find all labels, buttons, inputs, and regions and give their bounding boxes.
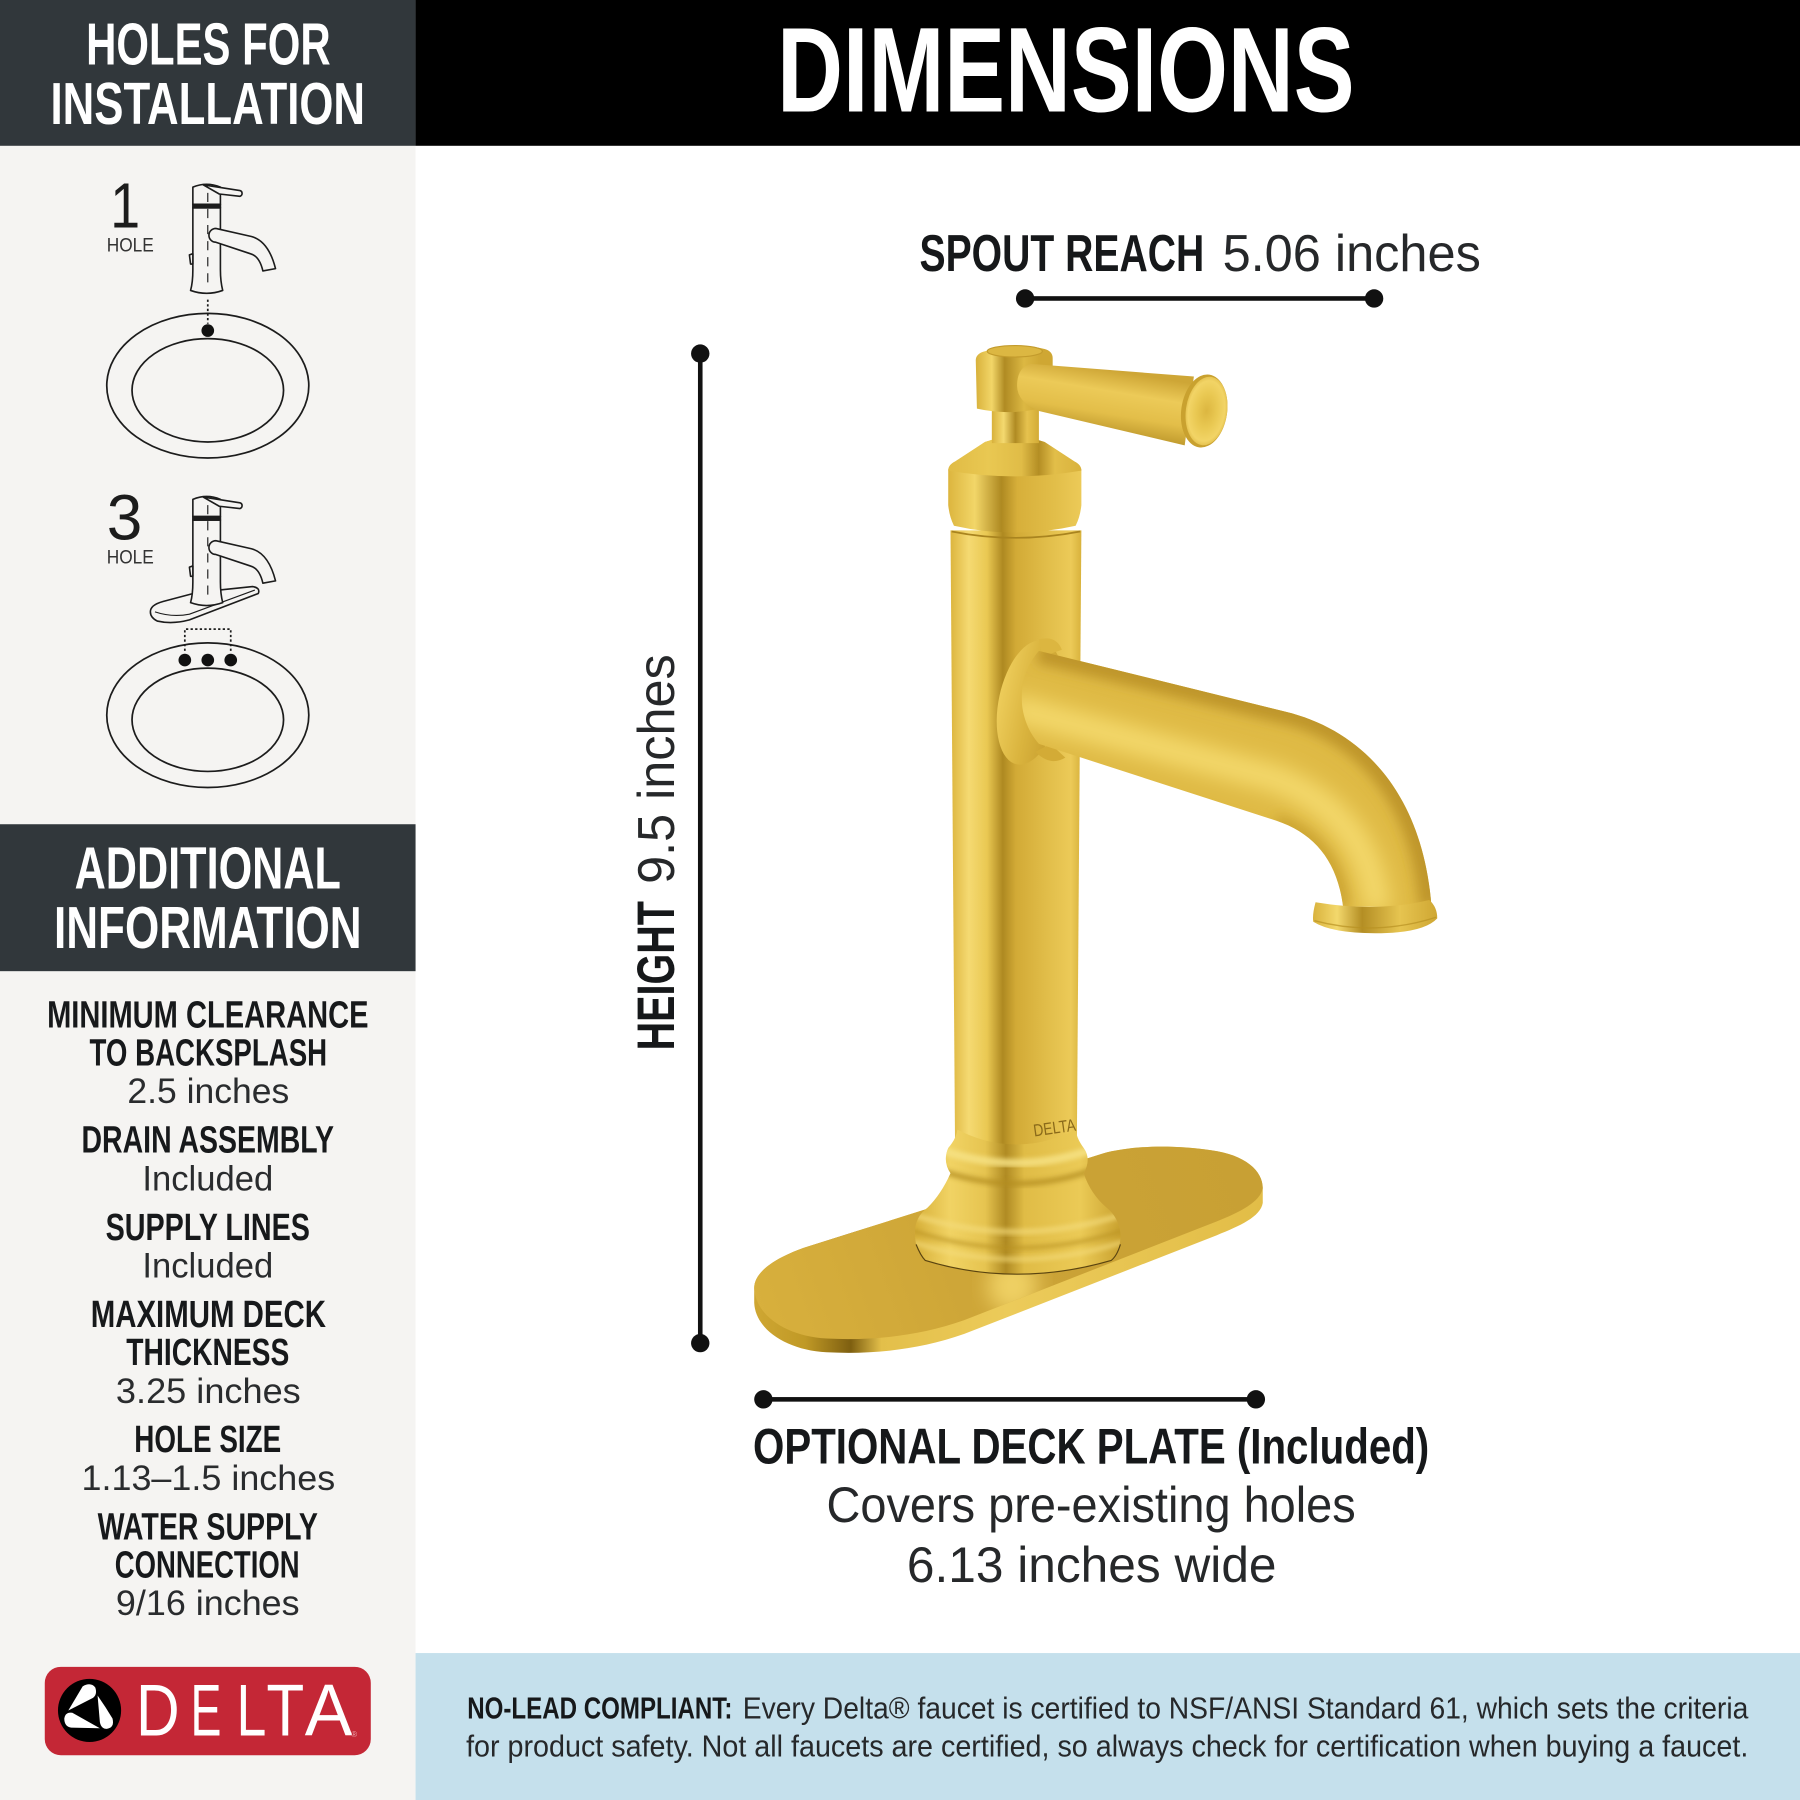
deck plate (754, 1147, 1263, 1353)
text block: optional deck plate: 6.13 inches wide (907, 1536, 1277, 1593)
icon: faucet (189, 184, 276, 293)
label: 1 hole: 1 (110, 169, 140, 241)
head collar (948, 437, 1081, 538)
spec: water supply connection: CONNECTION (115, 1544, 300, 1586)
spec: hole size: 1.13–1.5 inches (82, 1458, 335, 1498)
label: 1 hole: HOLE (107, 235, 154, 256)
delta mark on column: DELTA (1032, 1115, 1077, 1140)
spec: supply lines: Included (142, 1246, 273, 1286)
title: dimensions: DIMENSIONS (777, 2, 1355, 137)
spec: maximum deck thickness (91, 1294, 326, 1411)
panel: no-lead compliant note (416, 1653, 1800, 1800)
logo wordmark: D (136, 1669, 180, 1752)
stem (992, 409, 1039, 443)
text block: additional information list (47, 994, 368, 1623)
spec: supply lines: SUPPLY LINES (106, 1207, 310, 1249)
spec: drain assembly: DRAIN ASSEMBLY (82, 1120, 334, 1162)
spec: minimum clearance: MINIMUM CLEARANCE (47, 994, 368, 1036)
panel: no-lead compliant note: Every Delta® faucet is certified to NSF/ANSI Standard 61, which sets the criteria (743, 1691, 1748, 1725)
icon group: 3 hole installation (107, 482, 309, 788)
logo wordmark: L (236, 1669, 266, 1752)
heading: holes for installation (0, 0, 416, 146)
spout tube (1022, 651, 1432, 907)
logo wordmark (136, 1669, 352, 1752)
logo wordmark: T (266, 1669, 304, 1752)
panel: no-lead compliant note: NO-LEAD COMPLIANT: (467, 1691, 732, 1725)
spec: water supply connection (98, 1506, 318, 1623)
spout outlet (1313, 900, 1437, 933)
text block: optional deck plate: OPTIONAL DECK PLATE (Included) (753, 1418, 1429, 1475)
text block: optional deck plate (753, 1418, 1429, 1593)
spec: hole size (82, 1419, 335, 1498)
arrow: deck plate dimension line (754, 1390, 1265, 1409)
panel: left sidebar (0, 0, 416, 1800)
heading: holes for installation: INSTALLATION (51, 70, 365, 137)
handle hub (976, 346, 1053, 412)
label: 3 hole (107, 482, 154, 569)
spec: drain assembly: Included (142, 1158, 273, 1198)
spec: minimum clearance (47, 994, 368, 1111)
label: height: 9.5 inches (627, 654, 685, 884)
label: spout reach (920, 224, 1481, 282)
logo wordmark: A (305, 1669, 352, 1752)
arrow: height dimension line (691, 344, 709, 1352)
label: height: HEIGHT (627, 901, 686, 1050)
label: spout reach: 5.06 inches (1223, 224, 1481, 282)
heading: additional information (0, 824, 416, 971)
logo: delta: ® (351, 1730, 357, 1739)
heading: holes for installation: HOLES FOR (86, 10, 331, 77)
icon: sink with three holes (107, 629, 309, 788)
spec: supply lines (106, 1207, 310, 1286)
logo: delta (45, 1667, 371, 1755)
base collar (913, 1130, 1123, 1274)
lever (1017, 364, 1232, 451)
spec: maximum deck thickness: MAXIMUM DECK (91, 1294, 326, 1336)
spec: minimum clearance: 2.5 inches (127, 1071, 289, 1111)
column (951, 530, 1081, 1154)
arrow: spout reach dimension line (1016, 289, 1383, 308)
spec: maximum deck thickness: 3.25 inches (116, 1371, 301, 1411)
icon: sink with one hole (107, 300, 309, 458)
spec: water supply connection: 9/16 inches (116, 1583, 300, 1623)
icon group: 1 hole installation (107, 169, 309, 458)
text block: optional deck plate: Covers pre-existing holes (827, 1476, 1356, 1533)
label: 3 hole: 3 (107, 482, 142, 554)
illustration: brushed gold faucet (754, 346, 1458, 1353)
label: 3 hole: HOLE (107, 548, 154, 569)
icon: faucet with deck plate (150, 496, 276, 623)
label: 1 hole (107, 169, 154, 256)
heading: additional information: ADDITIONAL (75, 835, 341, 902)
spec: water supply connection: WATER SUPPLY (98, 1506, 318, 1548)
title: dimensions (416, 0, 1800, 146)
label: spout reach: SPOUT REACH (920, 224, 1204, 282)
spec: hole size: HOLE SIZE (134, 1419, 281, 1461)
icon: delta emblem (58, 1679, 121, 1742)
label: height (627, 654, 686, 1050)
spec: maximum deck thickness: THICKNESS (126, 1332, 289, 1374)
heading: additional information: INFORMATION (54, 894, 362, 961)
spec: minimum clearance: TO BACKSPLASH (90, 1032, 327, 1074)
logo wordmark: E (191, 1669, 222, 1752)
spout flange (986, 634, 1073, 771)
spec: drain assembly (82, 1120, 334, 1198)
spout (986, 631, 1458, 933)
panel: no-lead compliant note: for product safety. Not all faucets are certified, so always check for certification when buying a faucet. (466, 1729, 1748, 1763)
